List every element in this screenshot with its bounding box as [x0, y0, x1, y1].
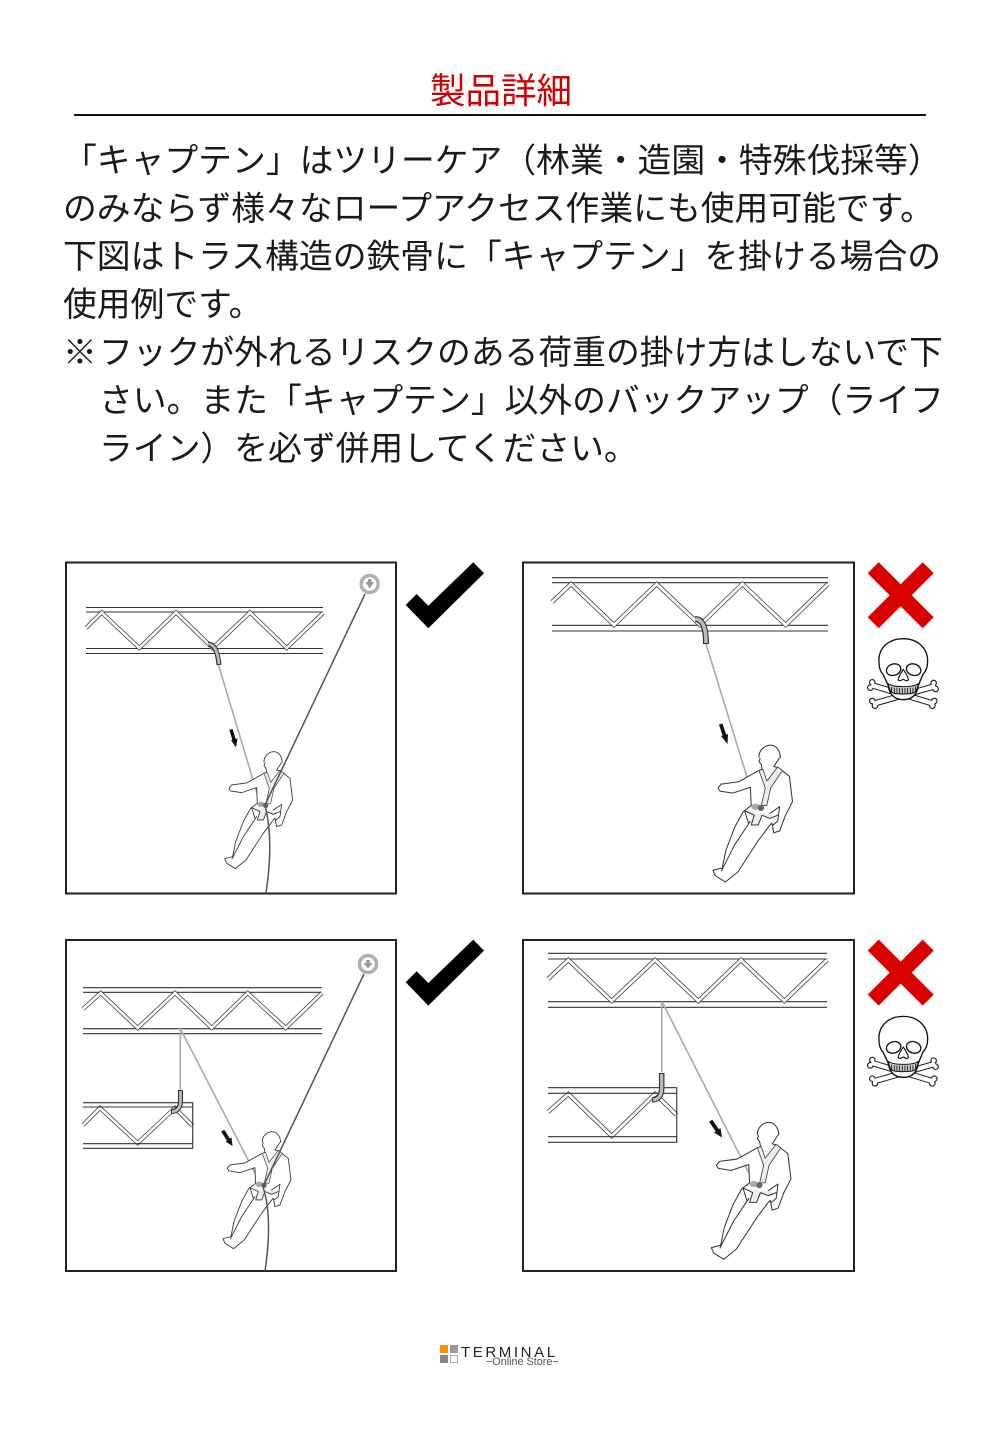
intro text block: フックが外れるリスクのある荷重の掛け方はしないで下	[99, 334, 943, 372]
anchor ring	[361, 576, 378, 592]
worker	[713, 745, 793, 882]
panel: bottom right, wrong use	[523, 940, 854, 1271]
main rope	[265, 594, 365, 893]
arrow	[223, 1131, 229, 1140]
panel: top left, correct use	[66, 562, 396, 894]
cross mark: bottom	[868, 940, 934, 1006]
worker	[225, 752, 293, 869]
title: 製品詳細	[430, 71, 572, 111]
lower truss	[83, 1103, 193, 1148]
arrow	[721, 724, 725, 737]
intro text block: 下図はトラス構造の鉄骨に「キャプテン」を掛ける場合の	[63, 238, 941, 276]
hook	[652, 1073, 662, 1100]
arrow	[711, 1121, 718, 1132]
intro text block: ライン）を必ず併用してください。	[99, 430, 638, 468]
truss	[552, 578, 828, 631]
check mark: bottom	[406, 940, 484, 1006]
worker	[711, 1122, 791, 1259]
upper truss	[548, 953, 827, 1007]
hook	[171, 1090, 180, 1112]
skull and crossbones: top	[867, 639, 939, 709]
logo squares	[440, 1345, 458, 1363]
skull and crossbones: bottom	[867, 1016, 939, 1087]
hook	[695, 619, 706, 644]
truss	[86, 608, 323, 654]
footer logo	[440, 1344, 559, 1368]
lower truss	[548, 1088, 677, 1142]
intro text block: のみならず様々なロープアクセス作業にも使用可能です。	[63, 190, 934, 228]
sling and lanyard	[180, 1028, 260, 1183]
panel: top right, wrong use	[523, 562, 854, 894]
panel: bottom left, correct use	[66, 940, 396, 1271]
lanyard rope	[706, 644, 755, 803]
intro text block: ※	[63, 334, 97, 372]
arrow	[231, 730, 234, 741]
hook	[208, 644, 219, 665]
lanyard rope	[218, 665, 260, 803]
main rope	[263, 974, 364, 1271]
check mark: top	[406, 562, 484, 628]
cross mark: top	[868, 562, 934, 628]
intro text block: 「キャプテン」はツリーケア（林業・造園・特殊伐採等）	[63, 142, 942, 180]
intro text block: さい。また「キャプテン」以外のバックアップ（ライフ	[99, 382, 944, 420]
worker	[223, 1132, 291, 1249]
upper truss	[83, 988, 322, 1034]
logo subtitle: −Online Store−	[486, 1356, 559, 1368]
intro text block	[63, 142, 944, 468]
logo wordmark: TERMINAL	[461, 1344, 558, 1361]
anchor ring	[360, 956, 376, 972]
sling and lanyard	[662, 1002, 753, 1182]
intro text block: 使用例です。	[63, 286, 262, 324]
